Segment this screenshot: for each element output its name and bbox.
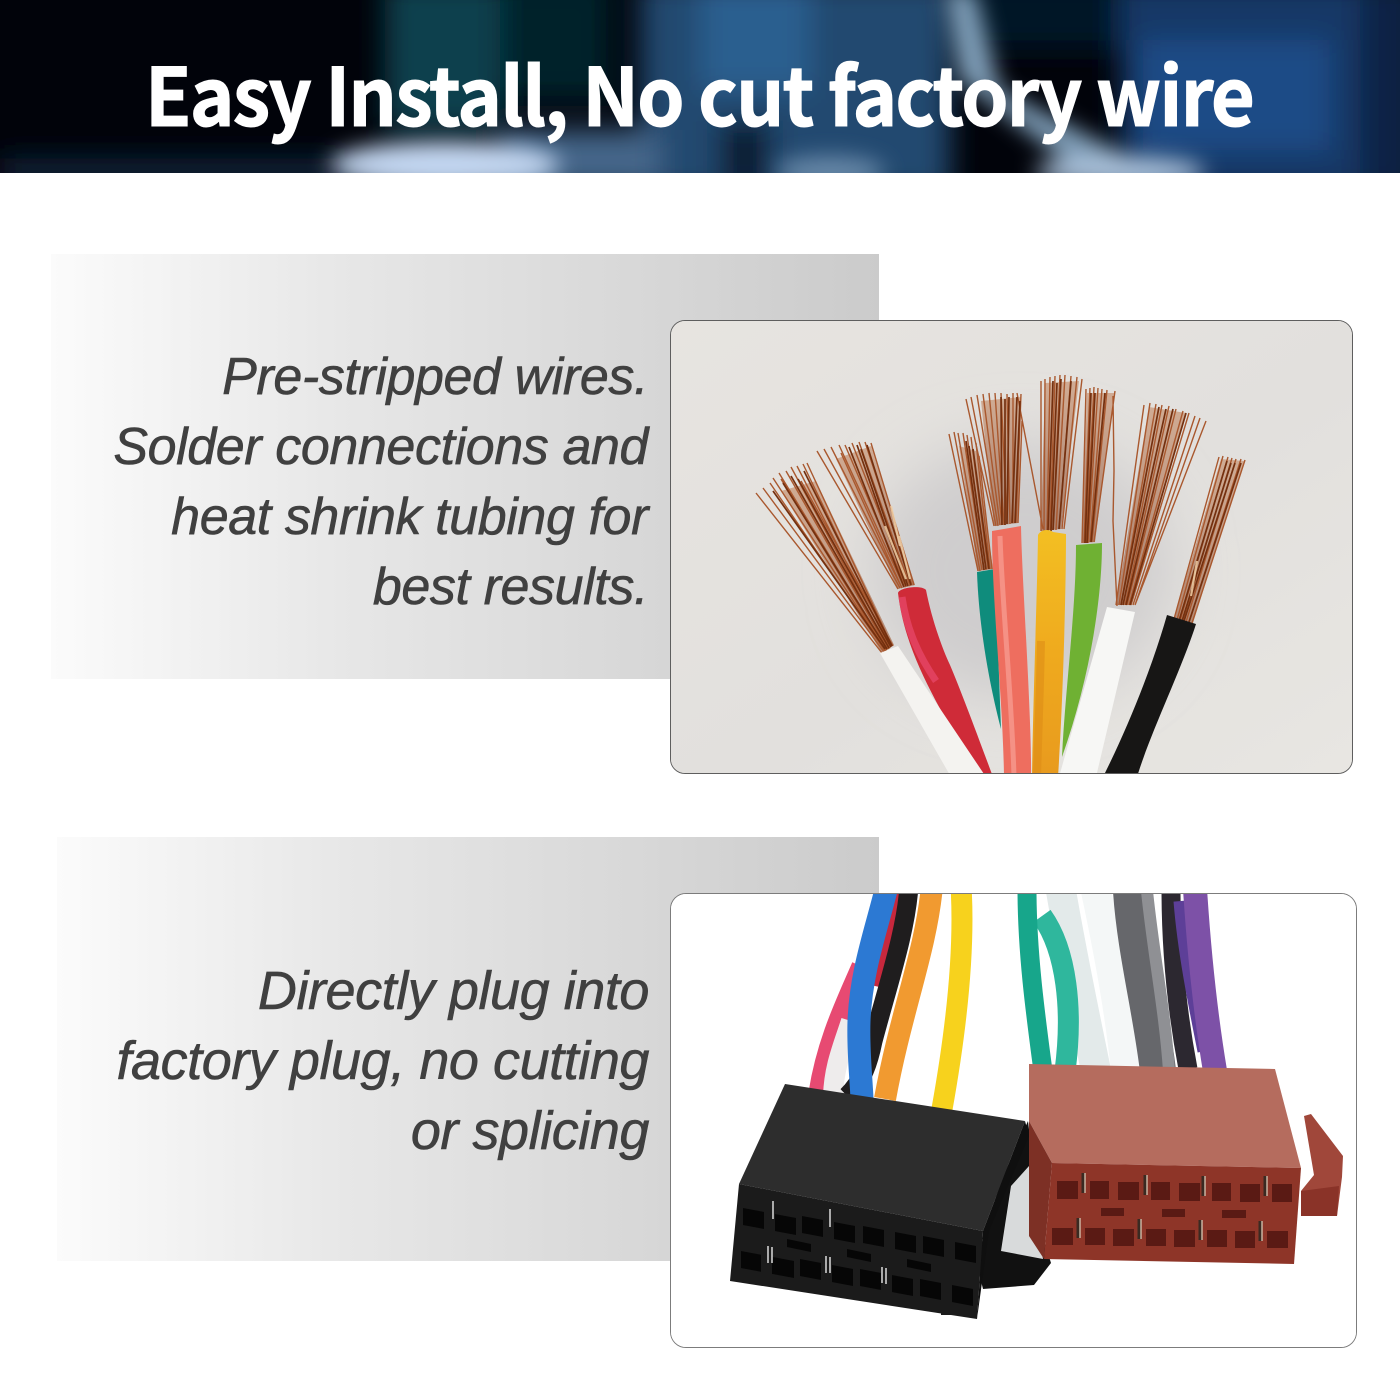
wire: black [1103,615,1196,777]
text: direct plug [116,961,650,1161]
text: direct plug: or splicing [411,1101,649,1161]
text: direct plug: Directly plug into [258,961,649,1021]
text: pre-stripped wires: Solder connections and [113,418,648,476]
photo: wiring harness connectors [670,893,1357,1348]
wire: red [898,587,993,777]
wires: right bundle [1027,889,1215,1071]
connector: red [1029,1064,1343,1264]
connector latch [1301,1114,1343,1216]
connector: black plate behind [976,1121,1051,1289]
text: pre-stripped wires: Pre-stripped wires. [222,348,648,406]
copper strands [781,381,1244,653]
wire: white left [880,646,986,777]
panel: pre-stripped wires background [51,254,879,679]
wire: green [1062,543,1102,757]
photo: stripped coloured wires [670,320,1353,774]
text: direct plug: factory plug, no cutting [116,1031,649,1091]
wire: teal [977,569,1001,729]
wire: yellow [1032,530,1066,777]
wire: salmon [992,526,1031,777]
wire: white right [1059,607,1135,777]
text: pre-stripped wires: best results. [373,558,648,616]
text: pre-stripped wires [113,348,650,616]
wires: left bundle [818,886,962,1109]
connector: black [730,1084,1029,1319]
panel: direct plug background [57,837,879,1261]
title: Easy Install, No cut factory wire [145,34,1253,150]
banner with title [0,0,1400,173]
text: pre-stripped wires: heat shrink tubing for [171,488,648,546]
